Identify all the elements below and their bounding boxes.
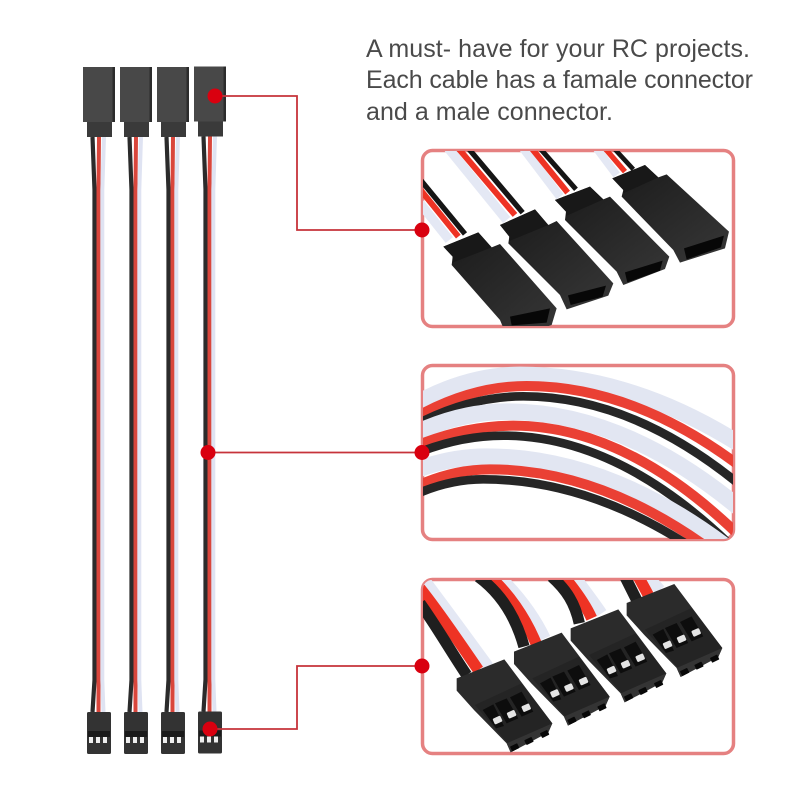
cable 4 (194, 66, 226, 754)
close-up image: wire arcs (423, 366, 733, 539)
connector line: male (210, 666, 422, 729)
infographic canvas (83, 39, 753, 756)
marker dot: male connector on cable (202, 722, 218, 736)
heading text: Each cable has a famale connector (366, 66, 753, 94)
close-up image: male connectors (420, 577, 722, 752)
cable 1 (83, 67, 115, 754)
marker dot: female connector on cable (208, 88, 222, 104)
connector line: wires (208, 452, 422, 454)
marker dot: wires on cable (200, 445, 216, 460)
marker dot: wires panel (414, 445, 430, 460)
heading text: A must- have for your RC projects. (366, 35, 750, 63)
marker dot: male panel (414, 658, 430, 674)
cable 2 (120, 67, 152, 754)
cable 3 (157, 67, 189, 754)
heading text (366, 35, 753, 126)
connector line: female (215, 96, 422, 230)
marker dot: female panel (414, 222, 430, 238)
panel: male connectors close-up (420, 577, 734, 754)
panel: wires close-up (420, 364, 736, 542)
panel: female connectors close-up (420, 148, 734, 340)
close-up image: female connectors (420, 148, 729, 340)
heading text: and a male connector. (366, 98, 613, 126)
